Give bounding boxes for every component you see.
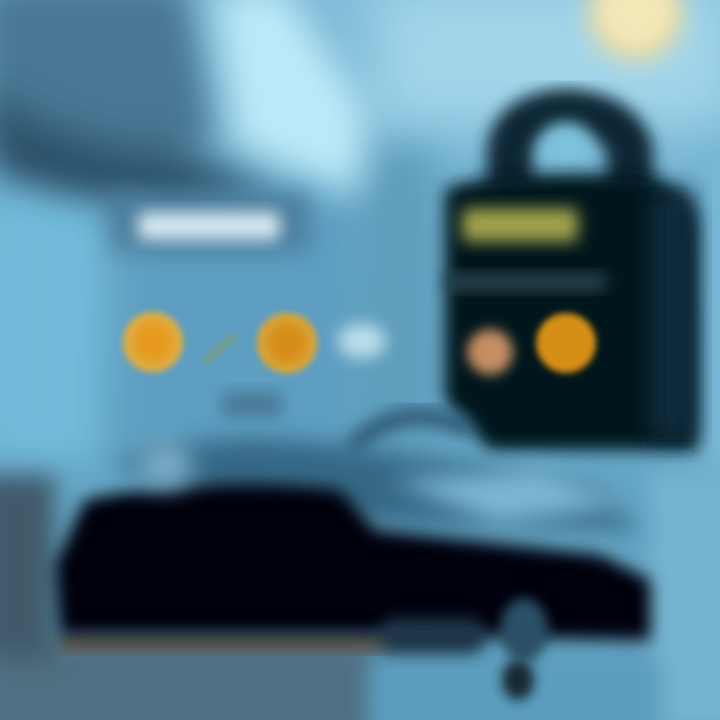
left wall glow (0, 190, 100, 460)
peach circle (467, 329, 513, 375)
handle opening (539, 122, 593, 168)
heading shadow (110, 192, 310, 252)
device light top right (390, 468, 630, 525)
right orange circle (257, 313, 317, 373)
brown reflection strip (60, 636, 390, 650)
upper right light area (370, 0, 720, 130)
connector between circles (205, 335, 235, 362)
grey subheading line (445, 274, 605, 290)
white heading blob (138, 212, 280, 240)
small label blob (222, 392, 282, 416)
bottom connectors (380, 598, 548, 700)
orange circle (536, 313, 596, 373)
light column (355, 150, 435, 450)
small light spot (137, 441, 193, 489)
yellow heading blob (462, 208, 578, 242)
right floor light (650, 470, 720, 720)
top left dark shape (0, 0, 215, 170)
centre panel (120, 200, 360, 450)
right edge light (700, 150, 720, 470)
bottom right floor (370, 660, 660, 720)
top left shadow band (0, 90, 280, 210)
left floor dark band (0, 475, 55, 660)
bag highlight edge (650, 190, 694, 440)
white small blob (338, 324, 386, 358)
device: black body (55, 484, 650, 640)
bright diagonal beam (215, 0, 365, 195)
moon glow (588, 0, 684, 62)
bottom floor (0, 640, 380, 720)
bag handle (510, 112, 630, 190)
bag: dark padlock shape (445, 112, 697, 450)
mid cable shapes (350, 416, 470, 450)
left orange circle (123, 312, 183, 372)
device: upper light surface (110, 438, 640, 530)
bag body (445, 174, 697, 450)
